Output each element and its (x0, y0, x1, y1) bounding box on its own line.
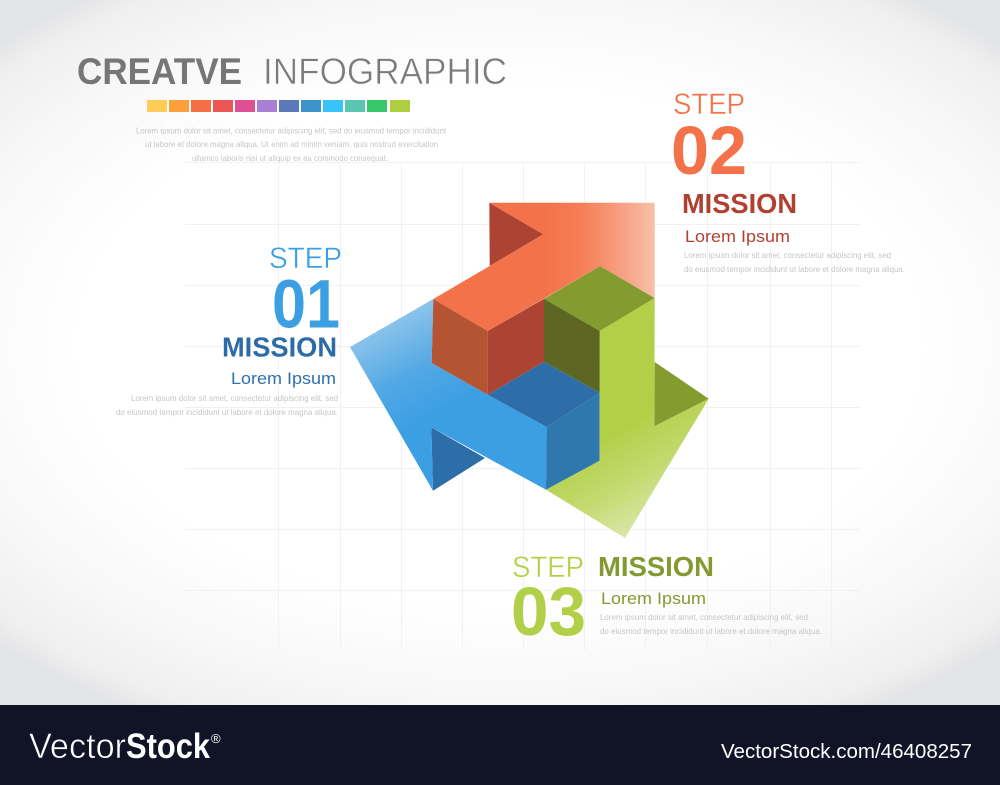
footer logo: Stock (126, 727, 210, 766)
step 2 subtitle: Lorem Ipsum (685, 227, 790, 246)
step 1 subtitle: Lorem Ipsum (231, 369, 336, 388)
footer logo (29, 727, 221, 766)
step 2 number: 02 (671, 112, 747, 189)
footer logo: Vector (29, 727, 126, 766)
intro text: ut labore et dolore magna aliqua. Ut enim ad minim veniam, quis nostrud exercitation (145, 139, 438, 149)
footer image id: VectorStock.com/46408257 (721, 741, 972, 763)
blue arrow (350, 299, 600, 491)
step 1 label: STEP (269, 242, 342, 275)
orange arrow (432, 203, 655, 395)
title (77, 51, 507, 92)
footer logo: ® (211, 731, 221, 746)
step 1 body text: do eiusmod tempor incididunt ut labore et dolore magna aliqua. (116, 407, 338, 417)
step 3 text block (511, 551, 822, 650)
step 3 body text: Lorem ipsum dolor sit amet, consectetur adipiscing elit, sed (600, 612, 808, 622)
step 2 body text (684, 250, 905, 274)
step 3 label: STEP (512, 551, 584, 584)
green arrow (544, 266, 709, 538)
intro text: Lorem ipsum dolor sit amet, consectetur adipiscing elit, sed do eiusmod tempor incididunt (136, 126, 447, 136)
step 1 body text (116, 393, 338, 417)
intro text (136, 126, 447, 163)
step 1 mission: MISSION (222, 332, 337, 362)
step 3 mission: MISSION (598, 551, 714, 582)
title: INFOGRAPHIC (263, 51, 507, 92)
step 1 text block (116, 242, 342, 417)
step 1 number: 01 (272, 266, 340, 342)
step 3 subtitle: Lorem Ipsum (601, 589, 706, 608)
step 3 body text (600, 612, 822, 636)
step 2 text block (671, 88, 905, 274)
intro text: ullamco laboris nisi ut aliquip ex ea commodo consequat. (192, 153, 388, 163)
step 2 body text: Lorem ipsum dolor sit amet, consectetur adipiscing elit, sed (684, 250, 891, 260)
step 3 body text: do eiusmod tempor incididunt ut labore et dolore magna aliqua. (600, 626, 822, 636)
isometric arrows diagram (350, 203, 709, 538)
title: CREATVE (77, 51, 242, 92)
step 2 label: STEP (673, 88, 745, 121)
step 2 mission: MISSION (682, 188, 797, 219)
step 2 body text: do eiusmod tempor incididunt ut labore et dolore magna aliqua. (684, 264, 905, 274)
footer bar (0, 705, 1000, 785)
colour swatch strip (147, 100, 410, 112)
step 3 number: 03 (511, 573, 586, 650)
step 1 body text: Lorem ipsum dolor sit amet, consectetur adipiscing elit, sed (131, 393, 338, 403)
